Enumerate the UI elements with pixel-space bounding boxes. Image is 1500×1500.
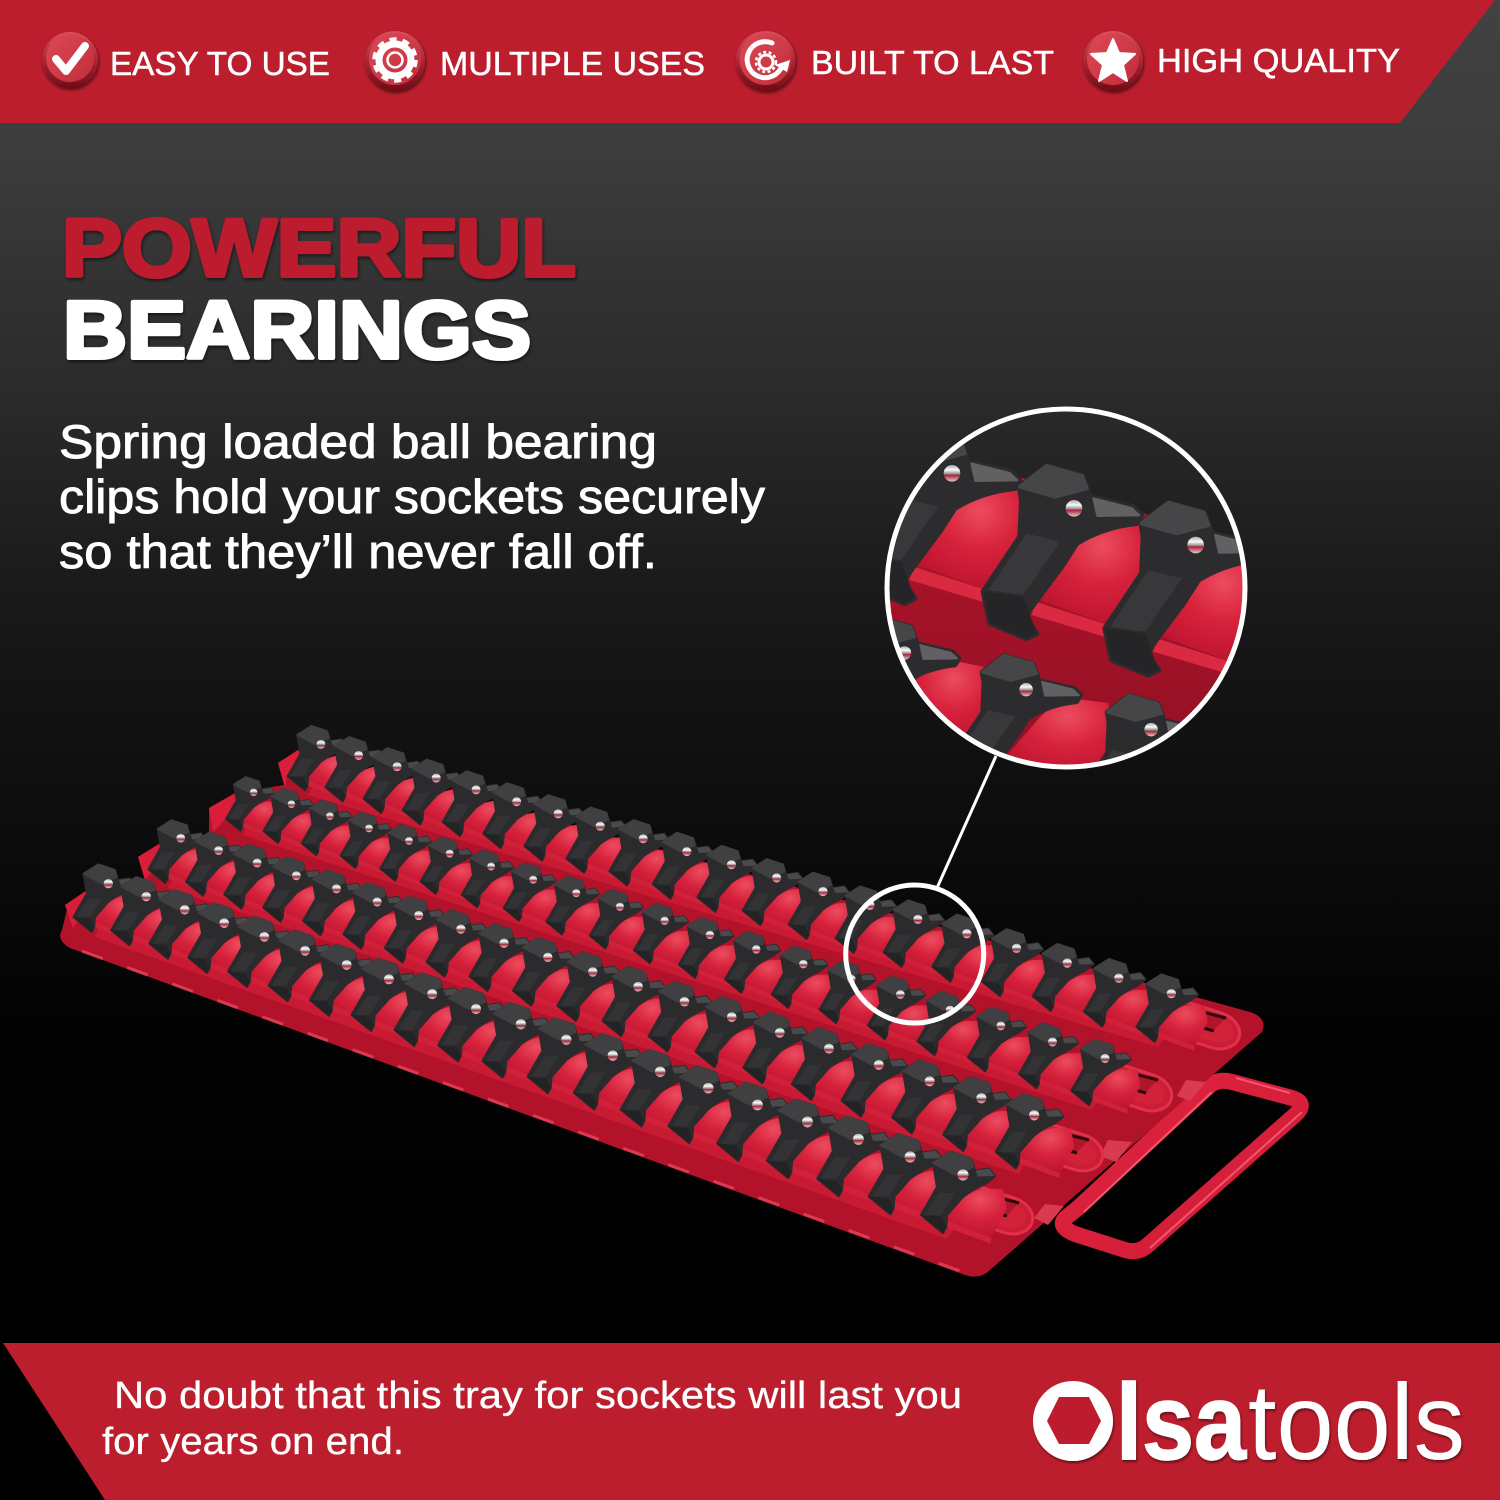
handle [1063, 1078, 1302, 1251]
description text: so that they’ll never fall off. [59, 525, 657, 578]
label: high quality: HIGH QUALITY [1157, 42, 1400, 79]
label: easy to use: EASY TO USE [110, 45, 330, 82]
icon: gear [365, 31, 425, 91]
rail row 2 [226, 777, 1177, 1117]
bottom message [102, 1375, 962, 1463]
description text: clips hold your sockets securely [59, 470, 766, 523]
socket tray [60, 726, 1302, 1277]
icon: star [1083, 31, 1143, 91]
description text: Spring loaded ball bearing [59, 415, 657, 468]
plate highlights [1034, 1080, 1206, 1225]
bottom banner [3, 1343, 1500, 1500]
rail row 4 [73, 864, 1038, 1243]
logo [1033, 1361, 1465, 1482]
heading [62, 203, 576, 376]
bottom message: No doubt that this tray for sockets will last you [114, 1375, 962, 1417]
heading: POWERFUL [62, 203, 576, 294]
icon: built to last cycle [736, 31, 796, 91]
rail row 1 [288, 726, 1245, 1055]
heading: BEARINGS [63, 285, 531, 376]
logo: O [1033, 1361, 1113, 1482]
logo: lsa [1116, 1361, 1247, 1482]
bottom message: for years on end. [102, 1421, 404, 1463]
top banner [0, 0, 1495, 123]
rail row 3 [148, 820, 1108, 1178]
callout connector line [937, 756, 996, 888]
label: multiple uses: MULTIPLE USES [440, 45, 705, 82]
plate edge marks [82, 951, 960, 1271]
tray plate [60, 750, 1264, 1277]
label: built to last: BUILT TO LAST [811, 44, 1054, 81]
callout ring on tray [846, 885, 984, 1023]
icon: check mark [42, 32, 98, 88]
raised rail ends [65, 750, 303, 928]
magnified detail circle [884, 406, 1248, 770]
description text [59, 415, 766, 578]
logo: tools [1248, 1361, 1465, 1482]
